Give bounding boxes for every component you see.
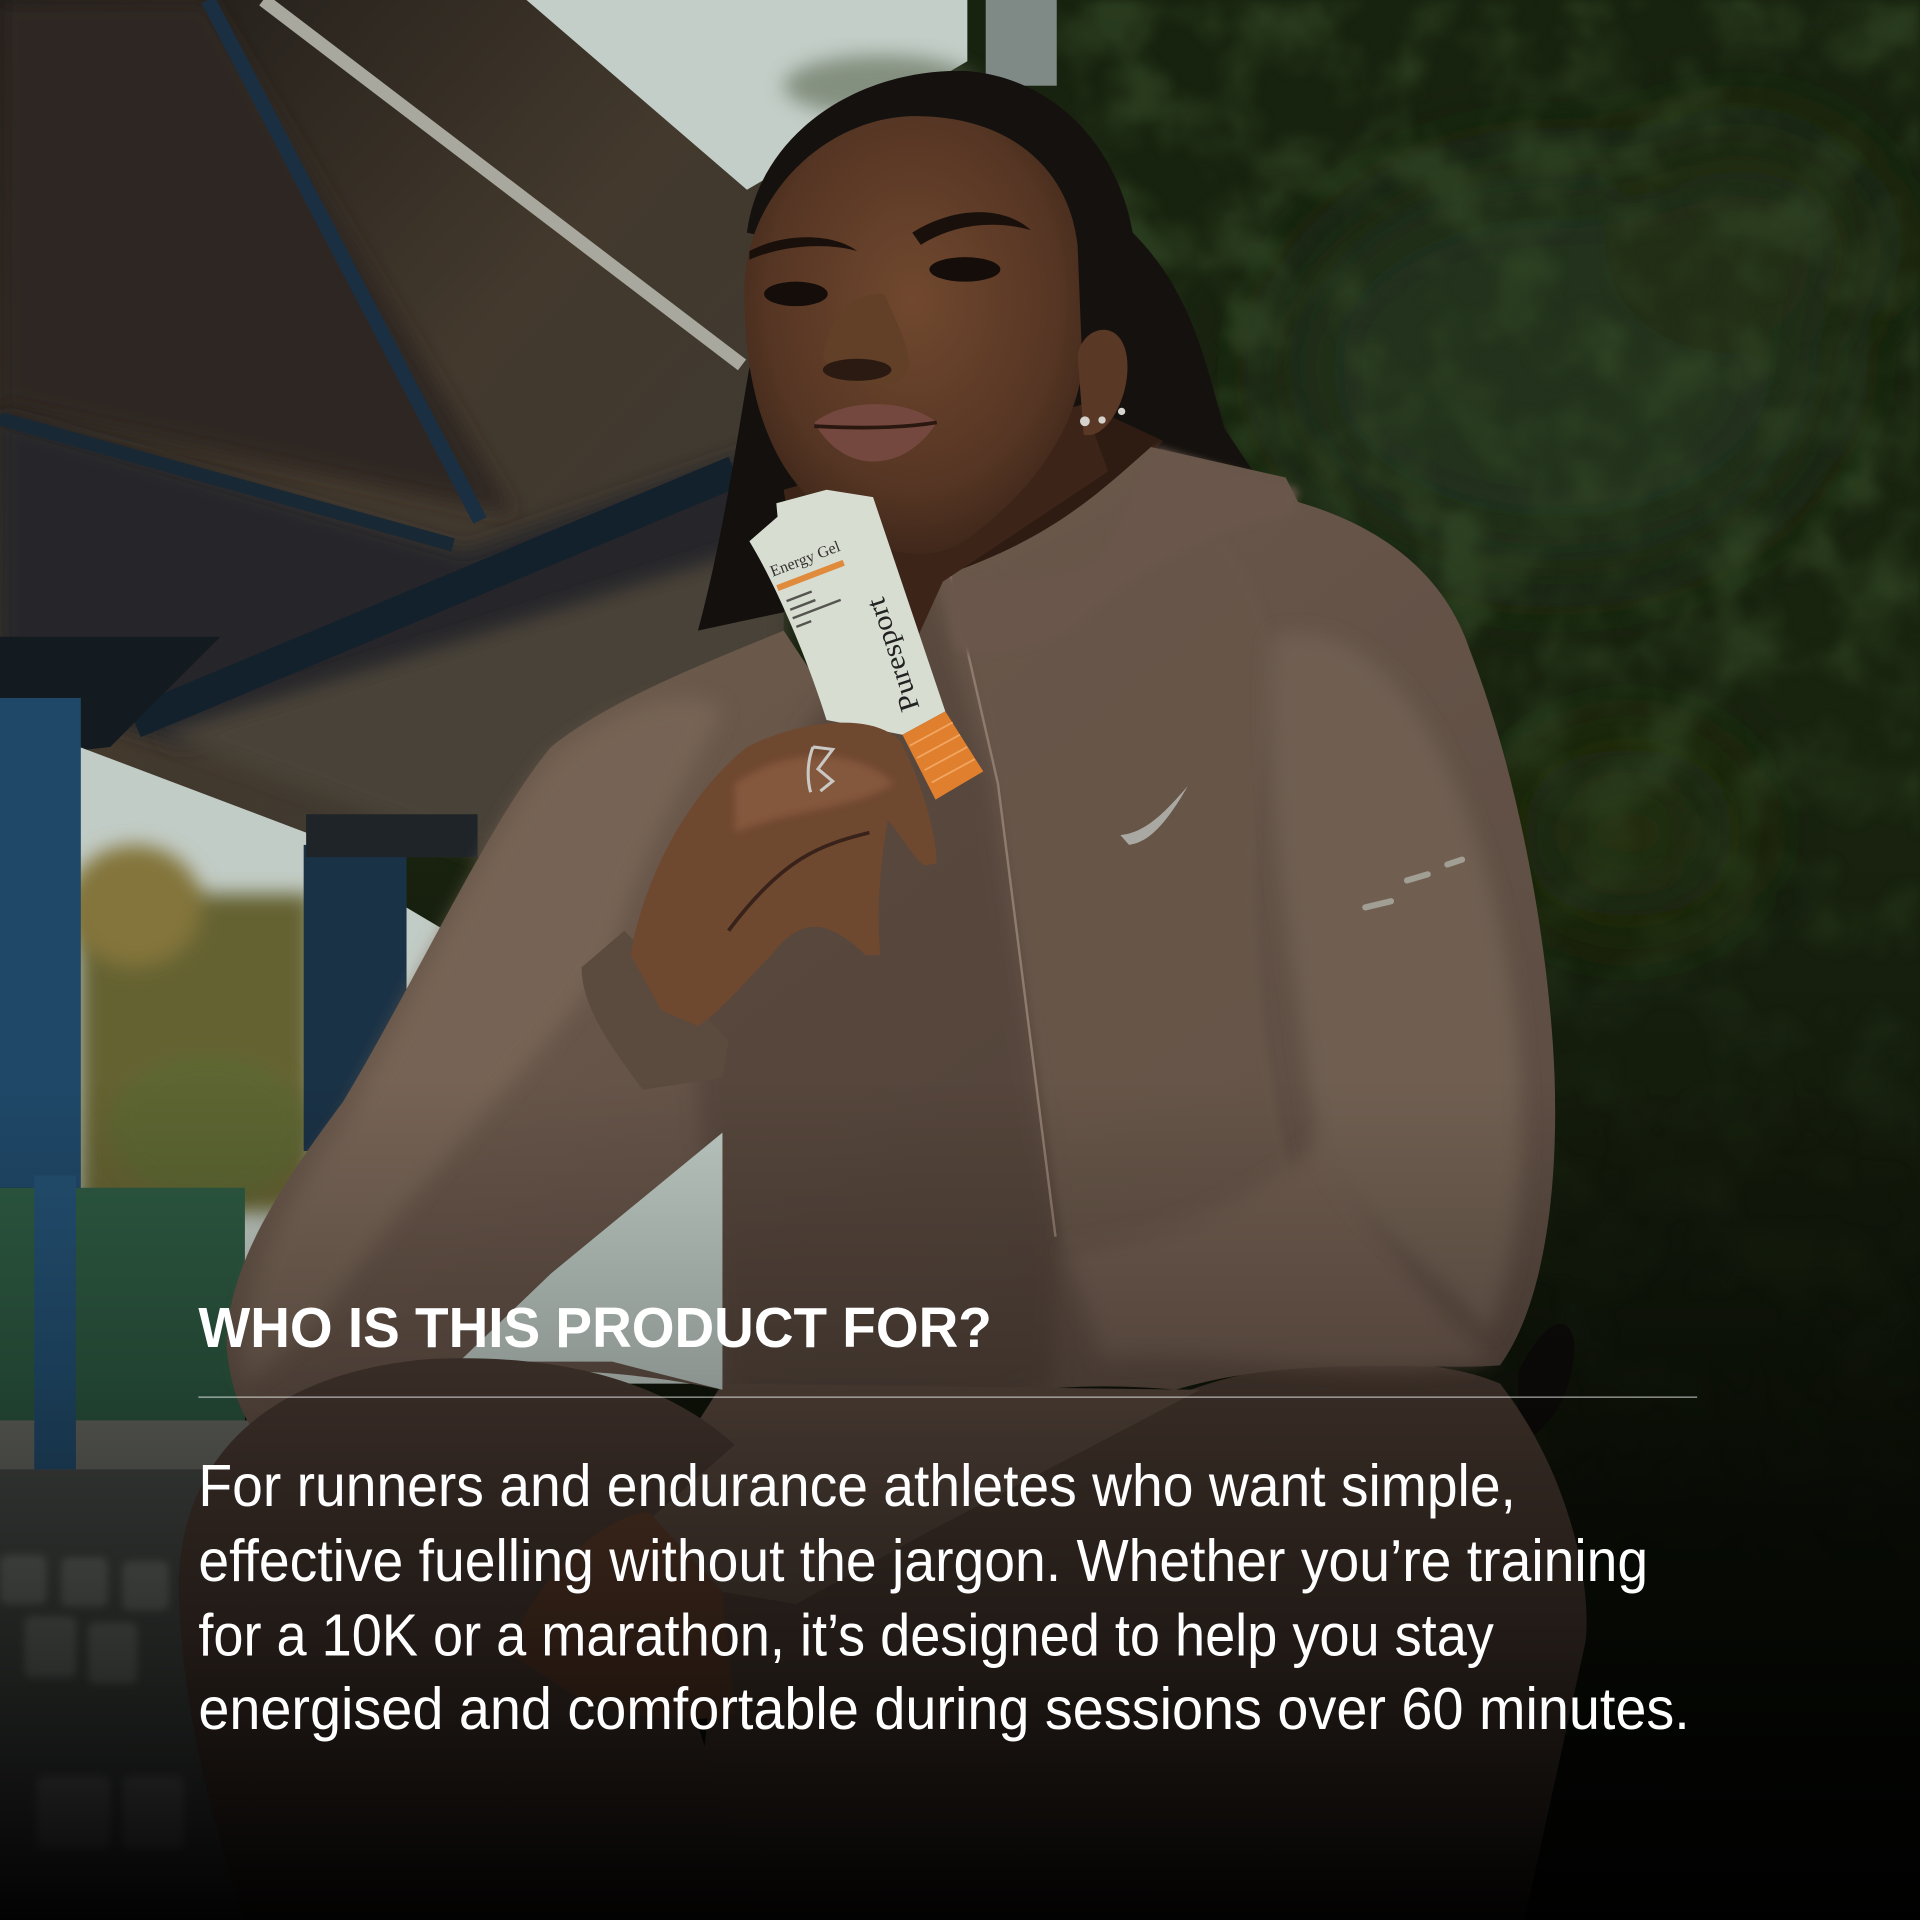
dark bottom gradient overlay bbox=[0, 1078, 1920, 1920]
pouch text: brand: Puresport bbox=[860, 594, 926, 715]
text panel bbox=[198, 1296, 1697, 1742]
background: blue pillar, green fence and seating bbox=[0, 698, 269, 1920]
body paragraph: energised and comfortable during sessions over 60 minutes. bbox=[198, 1675, 1690, 1742]
left thigh bbox=[179, 1358, 759, 1920]
body paragraph bbox=[198, 1452, 1690, 1742]
body paragraph: for a 10K or a marathon, it’s designed to help you stay bbox=[198, 1602, 1494, 1669]
heading: WHO IS THIS PRODUCT FOR? bbox=[198, 1296, 992, 1359]
sky gap under the forearm bbox=[459, 1133, 722, 1390]
jacket hem bbox=[618, 1384, 1200, 1604]
neck and chin bbox=[784, 404, 1108, 649]
neck backing bbox=[784, 404, 1163, 649]
pouch flavour strip bbox=[776, 560, 845, 591]
hair bbox=[698, 71, 1574, 1445]
background: stadium roof and sky bbox=[0, 0, 1057, 857]
background: sky gap and autumn tree bbox=[67, 747, 735, 1384]
pouch text: product name: Energy Gel bbox=[768, 538, 843, 580]
jacket bbox=[227, 447, 1555, 1469]
body paragraph: effective fuelling without the jargon. Whether you’re training bbox=[198, 1527, 1648, 1594]
facial features bbox=[749, 212, 1127, 462]
right thigh bbox=[686, 1362, 1587, 1920]
energy gel pouch bbox=[749, 490, 983, 800]
body paragraph: For runners and endurance athletes who want simple, bbox=[198, 1452, 1516, 1519]
divider line bbox=[198, 1397, 1697, 1398]
jacket shading bbox=[243, 447, 1522, 1469]
hand on knee bbox=[508, 1512, 735, 1719]
hand bbox=[631, 723, 937, 1026]
athlete bbox=[179, 71, 1587, 1920]
face bbox=[744, 116, 1082, 554]
background: dark foliage bbox=[245, 0, 1920, 1628]
